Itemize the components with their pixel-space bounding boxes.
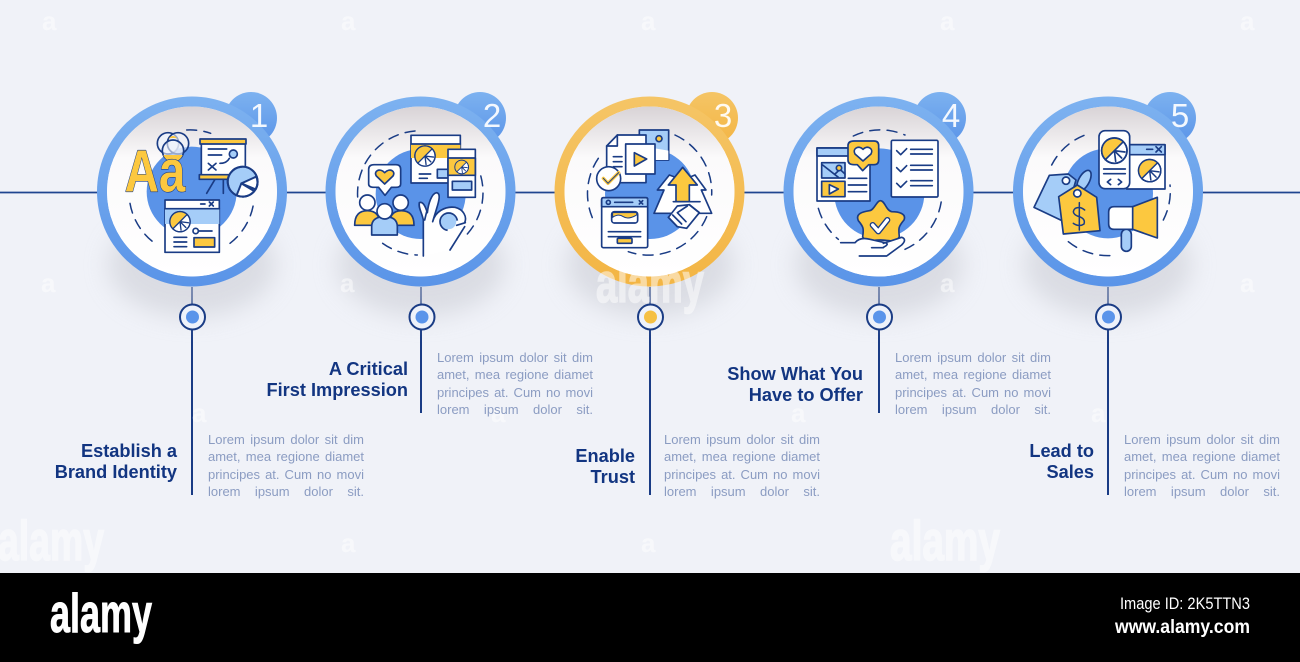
heading: step 4 [727, 364, 863, 405]
heading: step 3 [575, 446, 635, 487]
icon: first impression [355, 131, 483, 256]
step 4 circle [784, 92, 974, 413]
text block: step 4: principes at. Cum no movi [895, 385, 1051, 400]
watermarks: alamy [596, 251, 704, 314]
heading: step 4: Show What You [727, 364, 863, 384]
text block: step 4: Lorem ipsum dolor sit dim [895, 350, 1051, 365]
watermarks: a [1091, 398, 1106, 428]
text block: step 1 [208, 432, 364, 499]
text block: step 2: lorem ipsum dolor sit. [437, 402, 593, 417]
text block: step 3: principes at. Cum no movi [664, 467, 820, 482]
text block: step 1: lorem ipsum dolor sit. [208, 484, 364, 499]
heading: step 2: A Critical [329, 359, 408, 379]
heading: step 1: Establish a [81, 441, 177, 461]
number 5: 5 [1171, 97, 1189, 134]
heading: step 3: Enable [575, 446, 635, 466]
watermarks: a [940, 268, 955, 298]
watermarks: a [641, 6, 656, 36]
heading: step 1: Brand Identity [55, 462, 177, 482]
watermarks: a [41, 268, 56, 298]
icon: brand identity [125, 130, 260, 252]
heading: step 3: Trust [591, 467, 635, 487]
footer logo: alamy [50, 582, 152, 644]
text block: step 5: principes at. Cum no movi [1124, 467, 1280, 482]
text block: step 3 [664, 432, 820, 499]
text block: step 5: amet, mea regione diamet [1124, 449, 1280, 464]
node marker 2 [410, 304, 434, 330]
watermarks: a [341, 528, 356, 558]
heading: step 5: Lead to [1029, 441, 1094, 461]
number 2: 2 [483, 97, 501, 134]
text block: step 2 [437, 350, 593, 417]
text block: step 3: Lorem ipsum dolor sit dim [664, 432, 820, 447]
node marker 1 [180, 304, 205, 330]
watermarks: a [1240, 6, 1255, 36]
text block: step 5 [1124, 432, 1280, 499]
text block: step 2: Lorem ipsum dolor sit dim [437, 350, 593, 365]
text block: step 4: lorem ipsum dolor sit. [895, 402, 1051, 417]
text block: step 5: Lorem ipsum dolor sit dim [1124, 432, 1280, 447]
text block: step 1: Lorem ipsum dolor sit dim [208, 432, 364, 447]
icon: show offer [817, 130, 942, 256]
text block: step 5: lorem ipsum dolor sit. [1124, 484, 1280, 499]
footer band [0, 573, 1300, 662]
node marker 4 [867, 304, 892, 330]
heading: step 1 [55, 441, 178, 482]
watermarks: a [341, 6, 356, 36]
node marker 3 [638, 304, 663, 330]
step 5 circle [1013, 92, 1203, 495]
watermarks: a [340, 268, 355, 298]
text block: step 1: amet, mea regione diamet [208, 449, 364, 464]
heading: step 4: Have to Offer [749, 385, 863, 405]
text block: step 3: lorem ipsum dolor sit. [664, 484, 820, 499]
step 2 circle [326, 92, 516, 413]
watermarks: a [192, 398, 207, 428]
watermarks: a [641, 528, 656, 558]
watermarks: a [42, 6, 57, 36]
text block: step 2: principes at. Cum no movi [437, 385, 593, 400]
icon: brand identity: Aa [125, 138, 186, 205]
image id: Image ID: 2K5TTN3 [1120, 594, 1250, 613]
text block: step 1: principes at. Cum no movi [208, 467, 364, 482]
number 1: 1 [250, 97, 268, 134]
watermarks: a [940, 6, 955, 36]
watermarks: a [491, 398, 506, 428]
node marker 5 [1096, 304, 1121, 330]
watermarks: alamy [890, 509, 1000, 572]
watermarks: a [791, 398, 806, 428]
step 1 circle [97, 92, 287, 495]
number 4: 4 [942, 97, 960, 134]
step 3 circle [554, 92, 744, 495]
text block: step 4 [895, 350, 1051, 417]
watermarks: a [1240, 268, 1255, 298]
watermarks: alamy [0, 509, 104, 572]
text block: step 2: amet, mea regione diamet [437, 367, 593, 382]
heading: step 5 [1029, 441, 1094, 482]
number 3: 3 [714, 97, 732, 134]
text block: step 3: amet, mea regione diamet [664, 449, 820, 464]
heading: step 2 [266, 359, 408, 400]
icon: enable trust [587, 130, 712, 255]
heading: step 5: Sales [1046, 462, 1094, 482]
heading: step 2: First Impression [266, 380, 408, 400]
icon: lead to sales [1034, 131, 1170, 256]
text block: step 4: amet, mea regione diamet [895, 367, 1051, 382]
website: www.alamy.com [1114, 617, 1250, 638]
timeline axis [0, 192, 1300, 194]
